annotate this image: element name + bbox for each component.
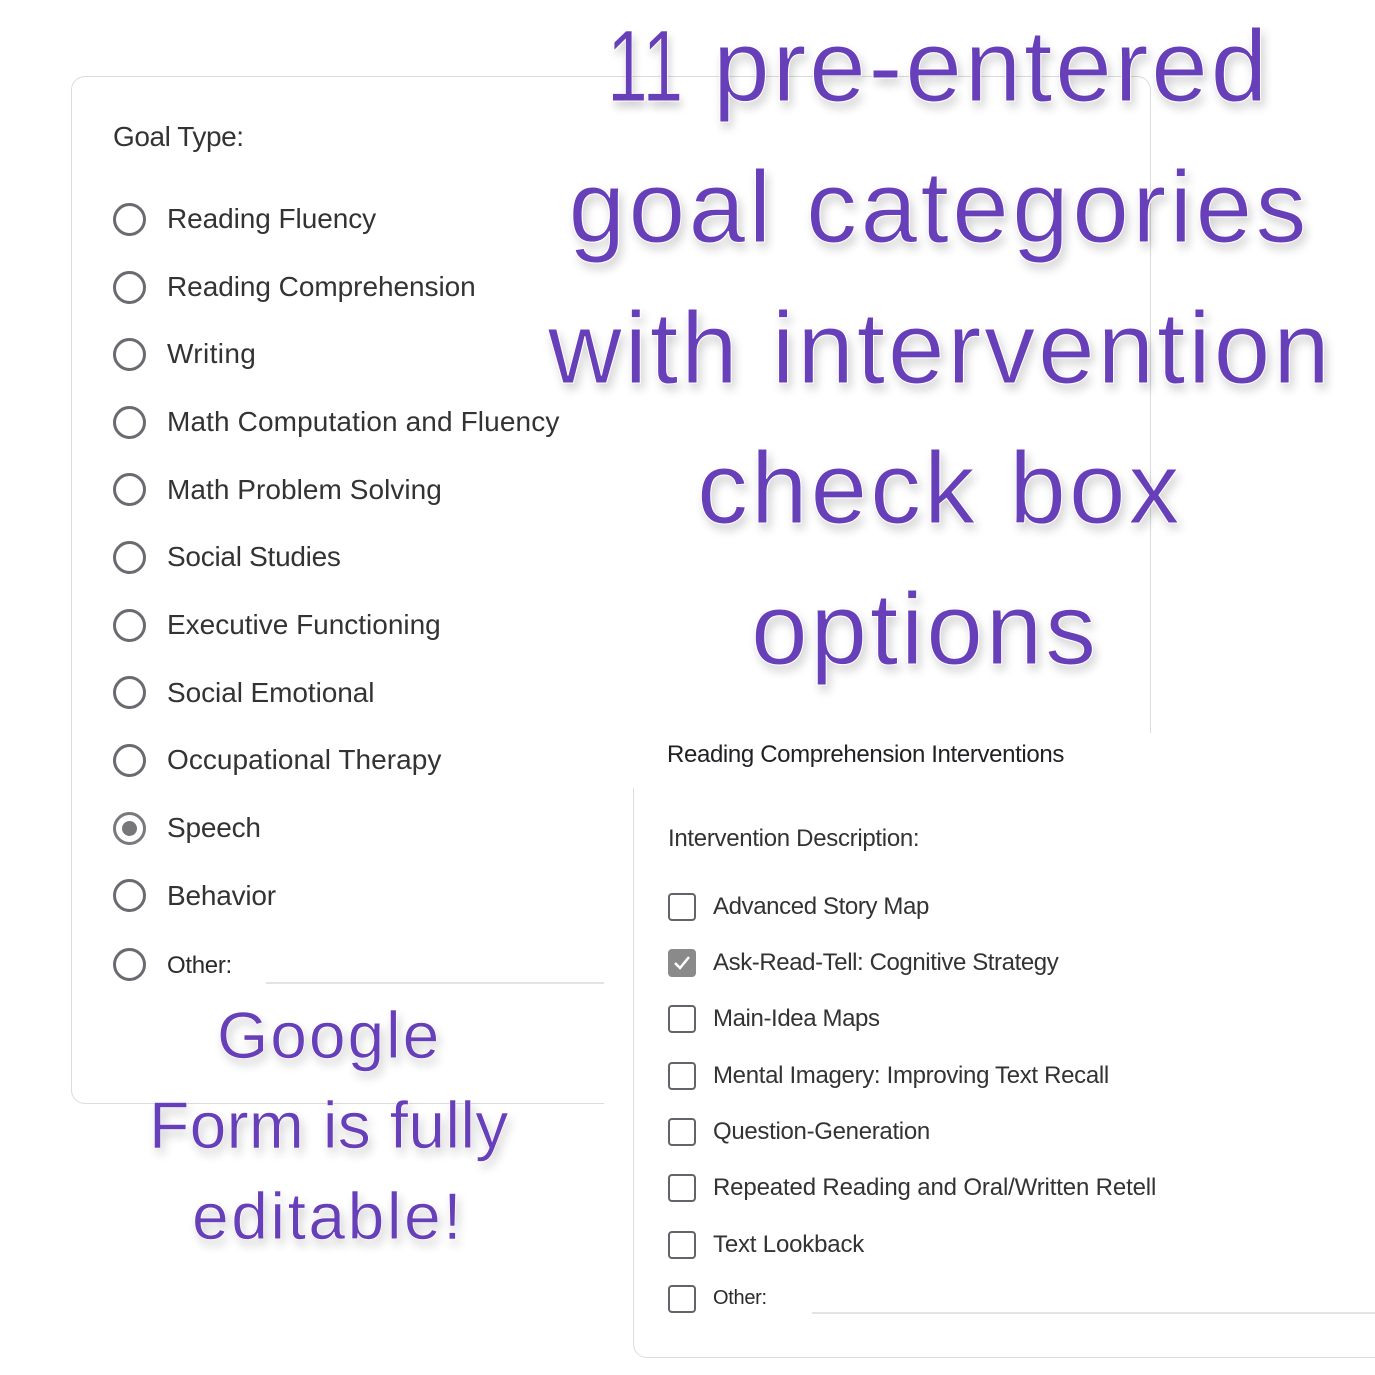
radio: Reading Fluency — [113, 203, 146, 236]
title: main heading: with intervention — [548, 291, 1333, 405]
radio: Social Studies — [113, 541, 146, 574]
title: main heading: 11 — [607, 9, 683, 123]
checkbox: Repeated Reading — [668, 1174, 696, 1202]
callout: google form editable: Form is fully — [149, 1088, 509, 1162]
label: Executive Functioning: Executive Functioning — [167, 609, 441, 640]
checkbox: Mental Imagery — [668, 1062, 696, 1090]
checkbox: Question-Generation — [668, 1118, 696, 1146]
radio: Social Emotional — [113, 676, 146, 709]
panel: white backing for interventions form — [604, 733, 1375, 1375]
label: Main-Idea Maps: Main-Idea Maps — [713, 1005, 880, 1032]
label: Math Computation and Fluency: Math Computation and Fluency — [167, 406, 559, 437]
checkbox: Other — [668, 1285, 696, 1313]
label: Other: Other: — [713, 1287, 767, 1309]
title: main heading: check box — [697, 431, 1182, 545]
input line: Other interventions — [812, 1312, 1375, 1314]
radio: Writing — [113, 338, 146, 371]
radio options list — [113, 203, 604, 984]
title: main heading: goal categories — [568, 150, 1310, 264]
callout: google form editable — [149, 998, 512, 1253]
radio: Occupational Therapy — [113, 744, 146, 777]
label: Speech: Speech — [167, 812, 261, 843]
title: main heading: pre-entered — [713, 9, 1270, 123]
radio: Other — [113, 948, 146, 981]
heading: reading comprehension interventions: Reading Comprehension Interventions — [667, 741, 1064, 768]
label: Question-Generation: Question-Generation — [713, 1118, 930, 1145]
label: Behavior: Behavior — [167, 880, 276, 911]
label: intervention description: Intervention Description: — [668, 825, 919, 852]
heading: goal type: Goal Type: — [113, 121, 244, 152]
radio: Behavior — [113, 879, 146, 912]
label: Writing: Writing — [167, 338, 256, 369]
checkbox: Advanced Story Map — [668, 893, 696, 921]
label: Reading Fluency: Reading Fluency — [167, 203, 376, 234]
label: Math Problem Solving: Math Problem Solving — [167, 474, 442, 505]
radio: Executive Functioning — [113, 609, 146, 642]
callout: google form editable: editable! — [192, 1179, 464, 1253]
label: Occupational Therapy: Occupational Therapy — [167, 744, 441, 775]
radio: Math Computation and Fluency — [113, 406, 146, 439]
label: Ask-Read-Tell: Ask-Read-Tell: Cognitive Strategy — [713, 949, 1058, 976]
label: Mental Imagery: Mental Imagery: Improving Text Recall — [713, 1062, 1109, 1089]
radio: Reading Comprehension — [113, 271, 146, 304]
checkbox: Main-Idea Maps — [668, 1005, 696, 1033]
title: main heading: options — [751, 572, 1099, 686]
checkbox options list — [668, 893, 1375, 1314]
label: Reading Comprehension: Reading Comprehension — [167, 271, 476, 302]
label: Advanced Story Map: Advanced Story Map — [713, 893, 929, 920]
label: Social Studies: Social Studies — [167, 541, 341, 572]
label: Social Emotional: Social Emotional — [167, 677, 374, 708]
panel: goal type form — [71, 76, 1151, 1104]
radio: Math Problem Solving — [113, 473, 146, 506]
checkbox: Text Lookback — [668, 1231, 696, 1259]
label: Other: Other: — [167, 952, 232, 979]
label: Text Lookback: Text Lookback — [713, 1231, 864, 1258]
label: Repeated Reading: Repeated Reading and Oral/Written Retell — [713, 1174, 1156, 1201]
panel: interventions form — [633, 788, 1375, 1358]
input line: Other — [266, 982, 604, 984]
callout: google form editable: Google — [217, 998, 441, 1072]
title: main heading — [548, 9, 1333, 694]
radio: Speech selected — [113, 812, 146, 845]
checkbox: Ask-Read-Tell checked — [668, 949, 696, 977]
